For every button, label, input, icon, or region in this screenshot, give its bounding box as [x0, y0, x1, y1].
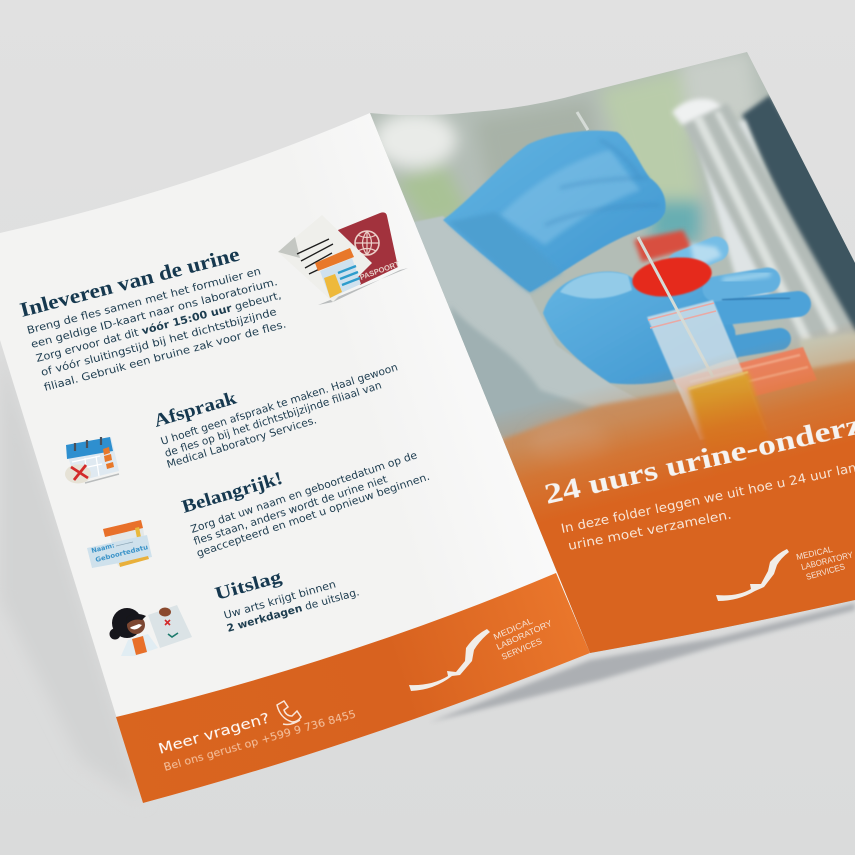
- heading: Inleveren van de urine: Inleveren van de urine: [18, 244, 242, 322]
- text block: inleveren: Breng de fles samen met het formulier en: [26, 265, 262, 337]
- heading: Meer vragen: Meer vragen?: [157, 711, 272, 758]
- icon: documents and passport: PASPOORT: [359, 259, 401, 282]
- icon: telephone: [277, 701, 301, 724]
- photo: orange gradient: [496, 328, 855, 653]
- heading: Afspraak: Afspraak: [152, 388, 240, 432]
- text: company name: SERVICES: [805, 561, 846, 582]
- text block: uitslag: 2 werkdagen de uitslag.: [226, 586, 361, 635]
- photo: lower glove: [543, 249, 798, 384]
- photo: lab background: [373, 50, 760, 242]
- shadow under the folder: [430, 603, 855, 722]
- photo: lab coat: [414, 216, 634, 406]
- photo: red cap: [631, 256, 713, 298]
- logo: left page: [409, 615, 554, 691]
- photo: blurred red cap behind: [634, 230, 692, 262]
- photo: upper glove: [443, 131, 666, 292]
- icon: calendar with cross: [65, 437, 119, 484]
- text block: inleveren: een geldige ID-kaart naar ons laboratorium.: [30, 276, 279, 351]
- text block: belangrijk: Zorg dat uw naam en geboortedatum op de: [189, 449, 419, 536]
- text block: afspraak: U hoeft geen afspraak te maken. Haal gewoon: [159, 361, 399, 448]
- logo: left page: SERVICES: [500, 636, 544, 662]
- photo: urine: [685, 370, 768, 458]
- text block: inleveren: of vóór sluitingstijd bij het dichtstbijzijnde: [40, 306, 278, 379]
- photo: specimen cup: [646, 300, 744, 440]
- icon: doctor with result sheet: [110, 605, 192, 656]
- text block: uitslag: Uw arts krijgt binnen: [223, 578, 337, 622]
- icon: documents and passport: [278, 212, 408, 305]
- panel: orange footer band: [116, 573, 590, 803]
- logo: right page: [716, 549, 789, 601]
- text block: inleveren: filiaal. Gebruik een bruine zak voor de fles.: [43, 318, 287, 394]
- text block: intro: urine moet verzamelen.: [567, 507, 733, 553]
- panel: left page: [0, 113, 590, 803]
- title: 24 uurs urine-onderzoek: 24 uurs urine-onderzoek: [542, 396, 855, 511]
- icon: labelled bottle: [87, 520, 152, 568]
- logo: left page: MEDICAL: [492, 615, 534, 642]
- heading: Belangrijk!: Belangrijk!: [180, 469, 285, 518]
- icon: labelled bottle: Geboortedatu: [95, 543, 149, 564]
- text block: intro: In deze folder leggen we uit hoe u 24 uur lang: [560, 458, 855, 536]
- text block: afspraak: de fles op bij het dichtstbijzijnde filiaal van: [163, 379, 383, 460]
- text block: inleveren: Zorg ervoor dat dit vóór 15:00 uur gebeurt,: [35, 290, 283, 365]
- text: company name: MEDICAL: [795, 544, 834, 562]
- heading: Uitslag: Uitslag: [213, 567, 285, 605]
- photo: dark equipment: [742, 95, 855, 360]
- text block: inleveren: [26, 265, 287, 394]
- text block: afspraak: Medical Laboratory Services.: [165, 414, 318, 471]
- text: phone number: Bel ons gerust op +599 9 736 8455: [162, 708, 357, 774]
- text block: belangrijk: fles staan, anders wordt de urine niet: [192, 473, 389, 548]
- text block: belangrijk: geaccepteerd en moet u opnieuw beginnen.: [195, 471, 431, 560]
- icon: labelled bottle: Naam:: [91, 541, 115, 555]
- text: company name: [795, 544, 854, 582]
- soft shadow beside the left page: [0, 340, 143, 803]
- photo: petri dish: [673, 346, 817, 396]
- panel: right page with photo: [360, 40, 855, 670]
- photo: table: [500, 360, 855, 540]
- logo: left page: LABORATORY: [495, 618, 554, 652]
- photo: stirring stick: [577, 112, 713, 377]
